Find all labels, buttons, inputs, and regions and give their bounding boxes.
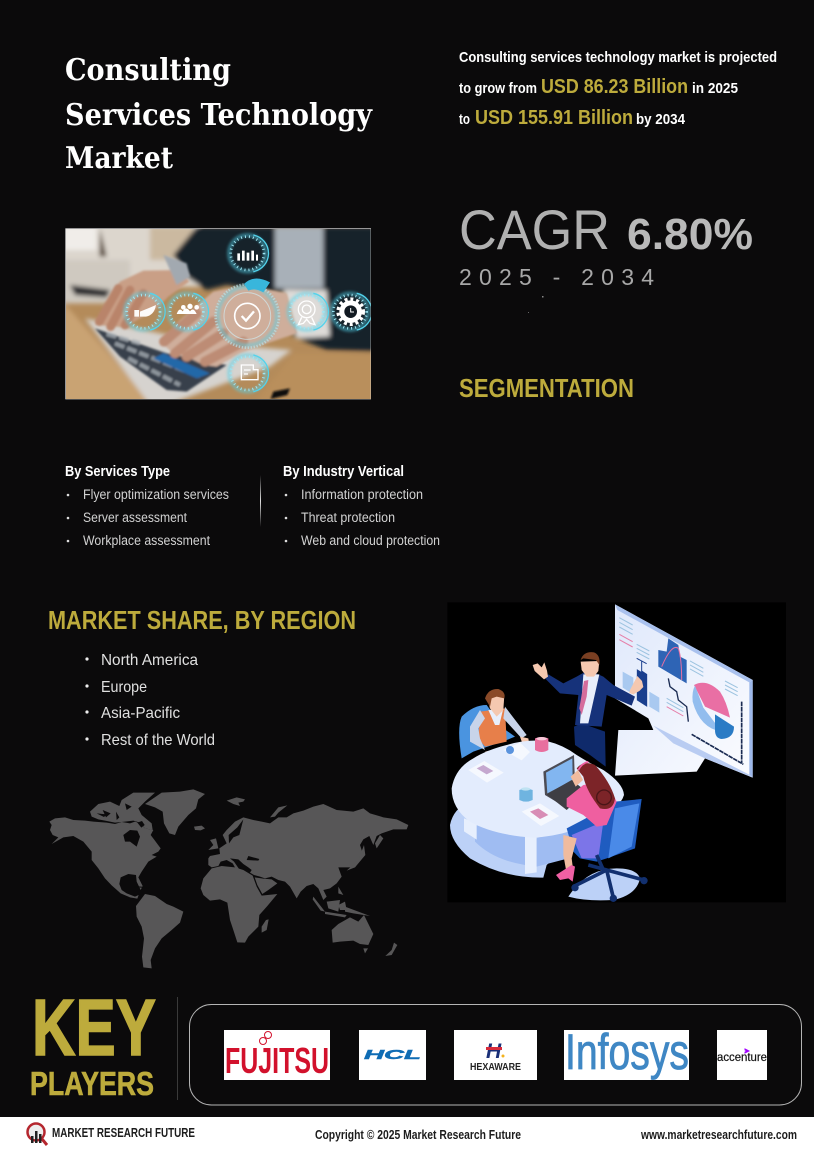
region list: North America: [101, 652, 198, 669]
eurasia: [208, 804, 408, 900]
seated woman and chair: [556, 762, 648, 902]
title: [65, 53, 373, 176]
key players heading: [30, 983, 156, 1102]
market projection text: to grow from: [459, 80, 537, 97]
arabia: [255, 877, 277, 894]
segmentation: by services type: Server assessment: [83, 510, 187, 525]
region list: Rest of the World: [101, 732, 215, 749]
footer logo: [28, 1124, 47, 1145]
key players heading: PLAYERS: [30, 1065, 154, 1102]
table: [450, 737, 624, 878]
seated man: [459, 689, 530, 759]
segmentation: by services type: By Services Type: [65, 464, 170, 480]
photo: hands typing with consulting icons: [60, 223, 377, 405]
inland seas: [97, 803, 259, 888]
key players panel: [190, 1004, 802, 1105]
CAGR: [459, 198, 753, 290]
CAGR: CAGR: [459, 198, 610, 261]
japan and asian islands: [313, 835, 383, 917]
region list: [85, 652, 215, 749]
segmentation: by industry vertical: Information protection: [301, 487, 423, 502]
region list: Asia-Pacific: [101, 705, 180, 722]
market projection text: by 2034: [636, 111, 686, 128]
segmentation heading: SEGMENTATION: [459, 373, 634, 403]
presentation screen: [615, 604, 753, 778]
market projection text: USD 86.23 Billion: [541, 76, 688, 98]
segmentation: by industry vertical: Web and cloud protection: [301, 533, 440, 548]
logo: infosys: Infosys: [565, 1024, 689, 1080]
logo: accenture: accenture: [717, 1050, 767, 1064]
market projection text: [459, 49, 777, 129]
segmentation: by services type: Flyer optimization services: [83, 487, 229, 502]
region list: Europe: [101, 679, 147, 696]
logo: hexaware: [454, 1030, 537, 1080]
market share heading: MARKET SHARE, BY REGION: [48, 605, 356, 635]
footer bar: Copyright © 2025 Market Research Future: [315, 1128, 521, 1142]
australia: [332, 915, 373, 945]
glow rings: [125, 235, 368, 392]
presenter: [533, 652, 643, 767]
segmentation: by industry vertical: By Industry Vertical: [283, 464, 404, 480]
market projection text: in 2025: [692, 80, 738, 97]
market projection text: USD 155.91 Billion: [475, 107, 633, 129]
CAGR: 6.80%: [627, 210, 753, 259]
arctic islands: [90, 793, 155, 830]
logo: fujitsu: FUJITSU: [225, 1040, 329, 1081]
africa: [201, 866, 277, 943]
greenland: [145, 789, 205, 835]
segmentation: by industry vertical: Threat protection: [301, 510, 395, 525]
laptop: [543, 755, 587, 810]
title: Consulting: [65, 53, 231, 88]
logo: hexaware: H: [486, 1040, 502, 1063]
title: Services Technology: [65, 98, 373, 133]
logo: accenture: [717, 1030, 767, 1080]
south america: [136, 894, 183, 968]
segmentation: by industry vertical: [283, 464, 440, 548]
title: Market: [65, 141, 173, 176]
logo: hcl: [359, 1030, 426, 1080]
segmentation: by services type: [65, 464, 229, 548]
illustration: team meeting in front of a chart screen: [447, 602, 786, 902]
logo: hexaware: HEXAWARE: [470, 1062, 521, 1073]
CAGR: 2025 - 2034: [459, 264, 654, 290]
segmentation: by services type: Workplace assessment: [83, 533, 210, 548]
world map: [49, 789, 408, 968]
footer bar: [0, 1117, 814, 1150]
logo: hcl: HCL: [364, 1047, 421, 1062]
footer bar: MARKET RESEARCH FUTURE: [52, 1126, 195, 1140]
north america: [49, 817, 161, 899]
key players heading: KEY: [32, 983, 156, 1072]
market projection text: to: [459, 111, 470, 128]
logo: fujitsu: [224, 1030, 330, 1081]
